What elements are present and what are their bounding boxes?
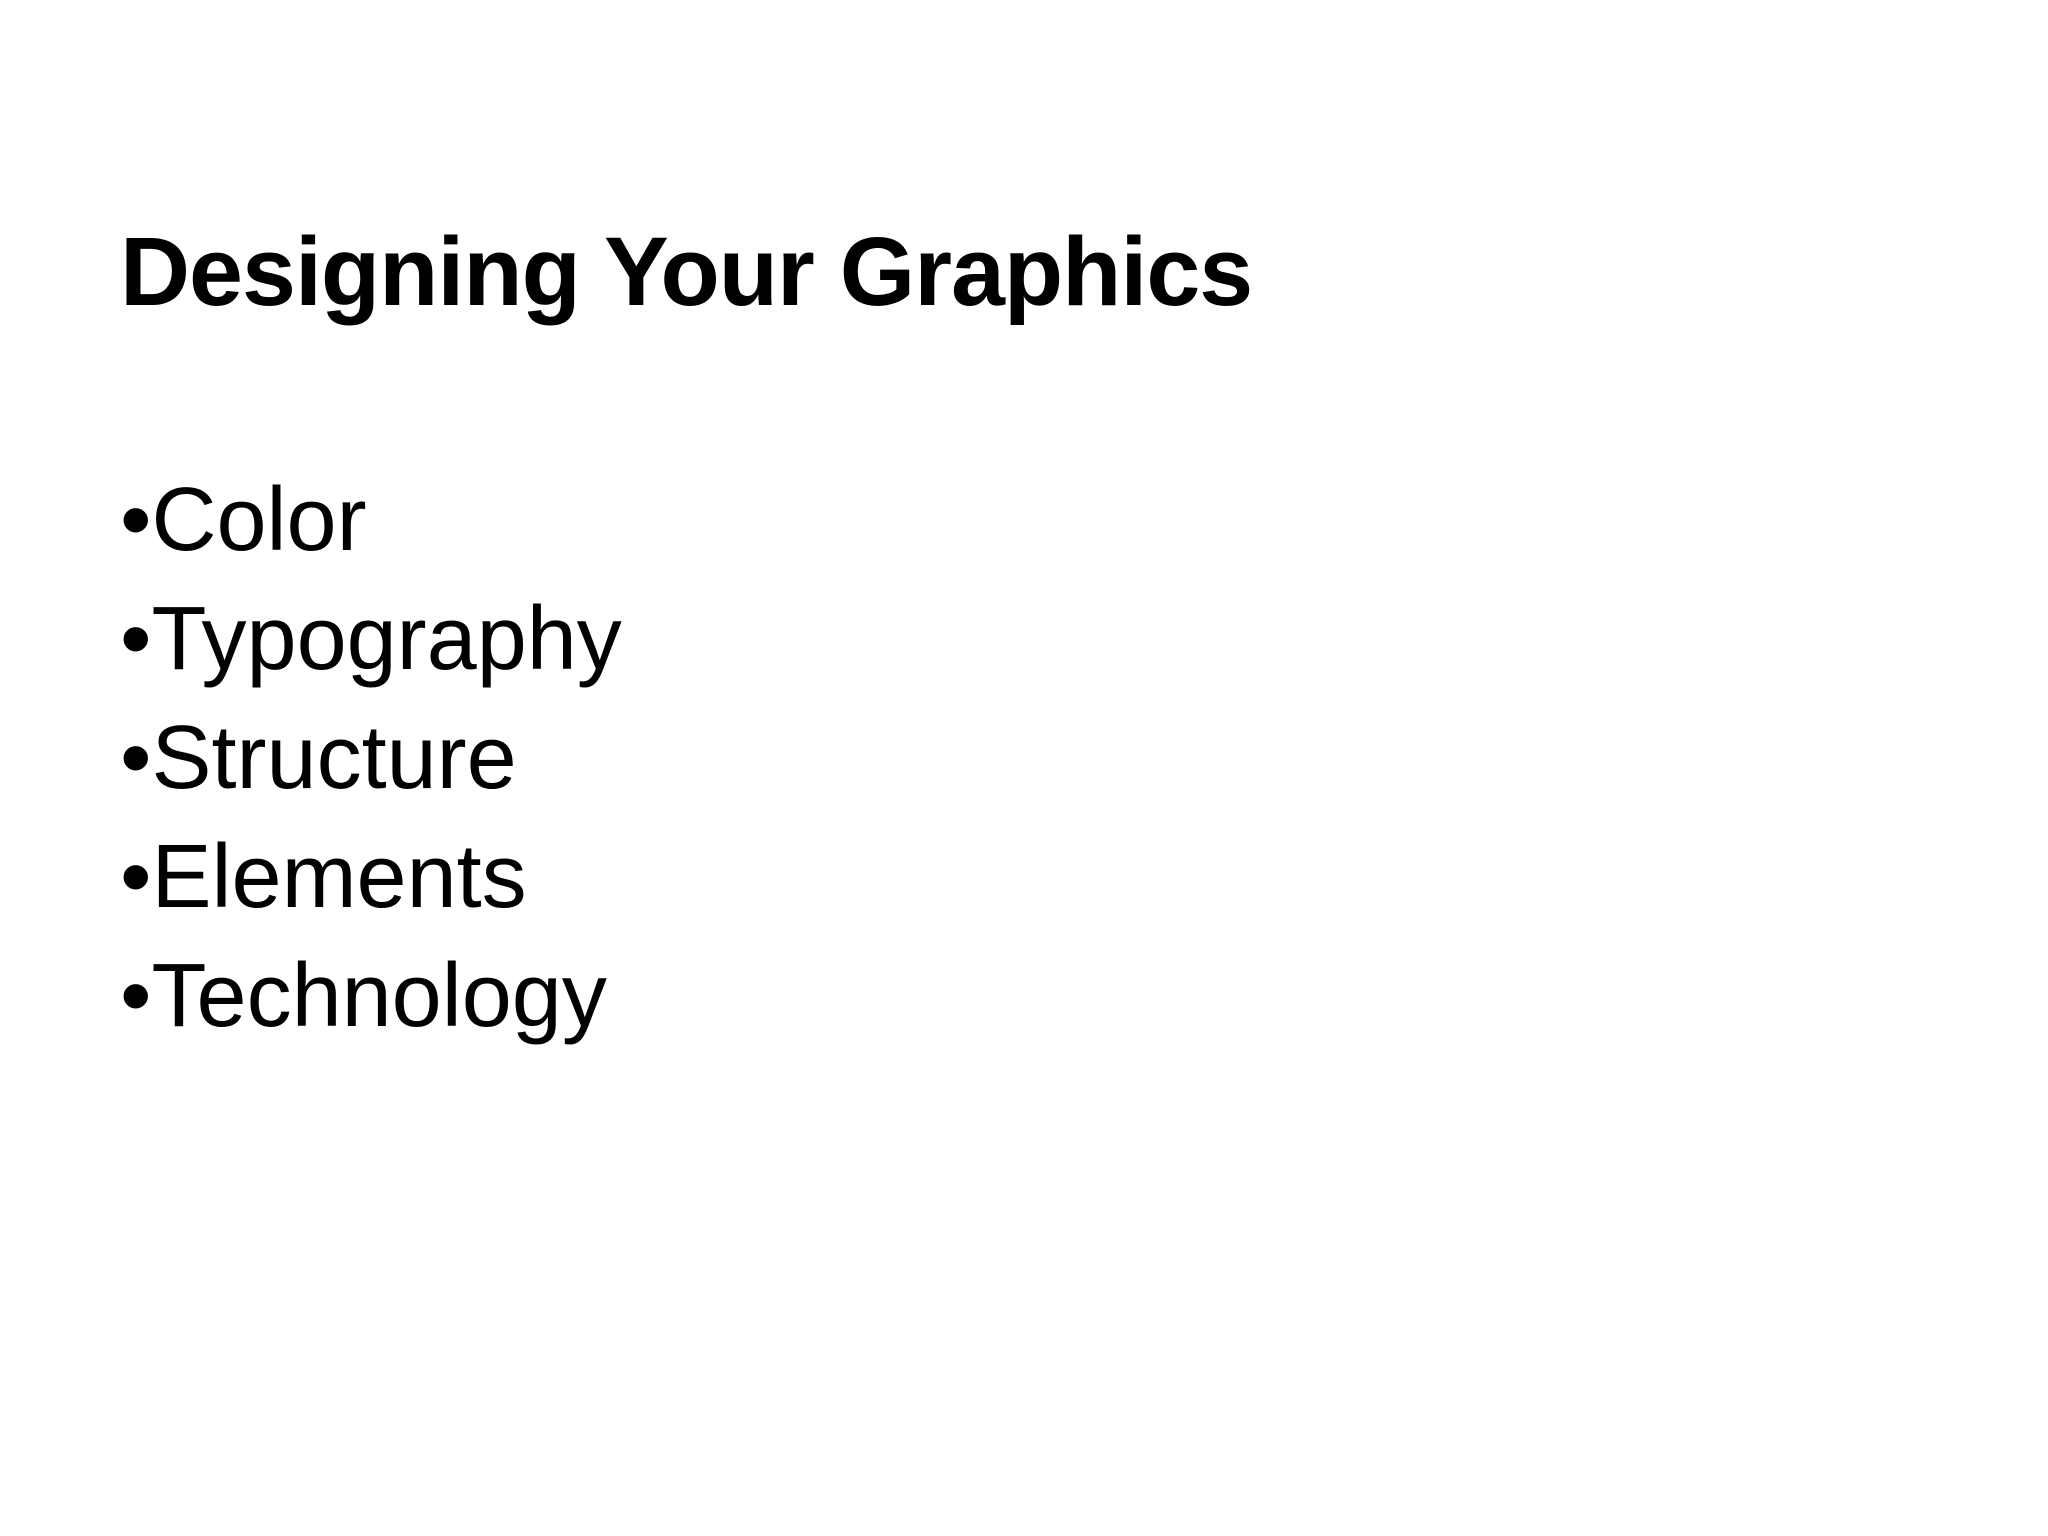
bullet list — [120, 470, 622, 1046]
bullet: technology: •Technology — [120, 946, 607, 1046]
bullet: typography: •Typography — [120, 589, 622, 689]
bullet: color: •Color — [120, 470, 367, 570]
bullet: elements: •Elements — [120, 827, 527, 927]
title: Designing Your Graphics — [120, 217, 1252, 326]
bullet: structure: •Structure — [120, 708, 517, 808]
